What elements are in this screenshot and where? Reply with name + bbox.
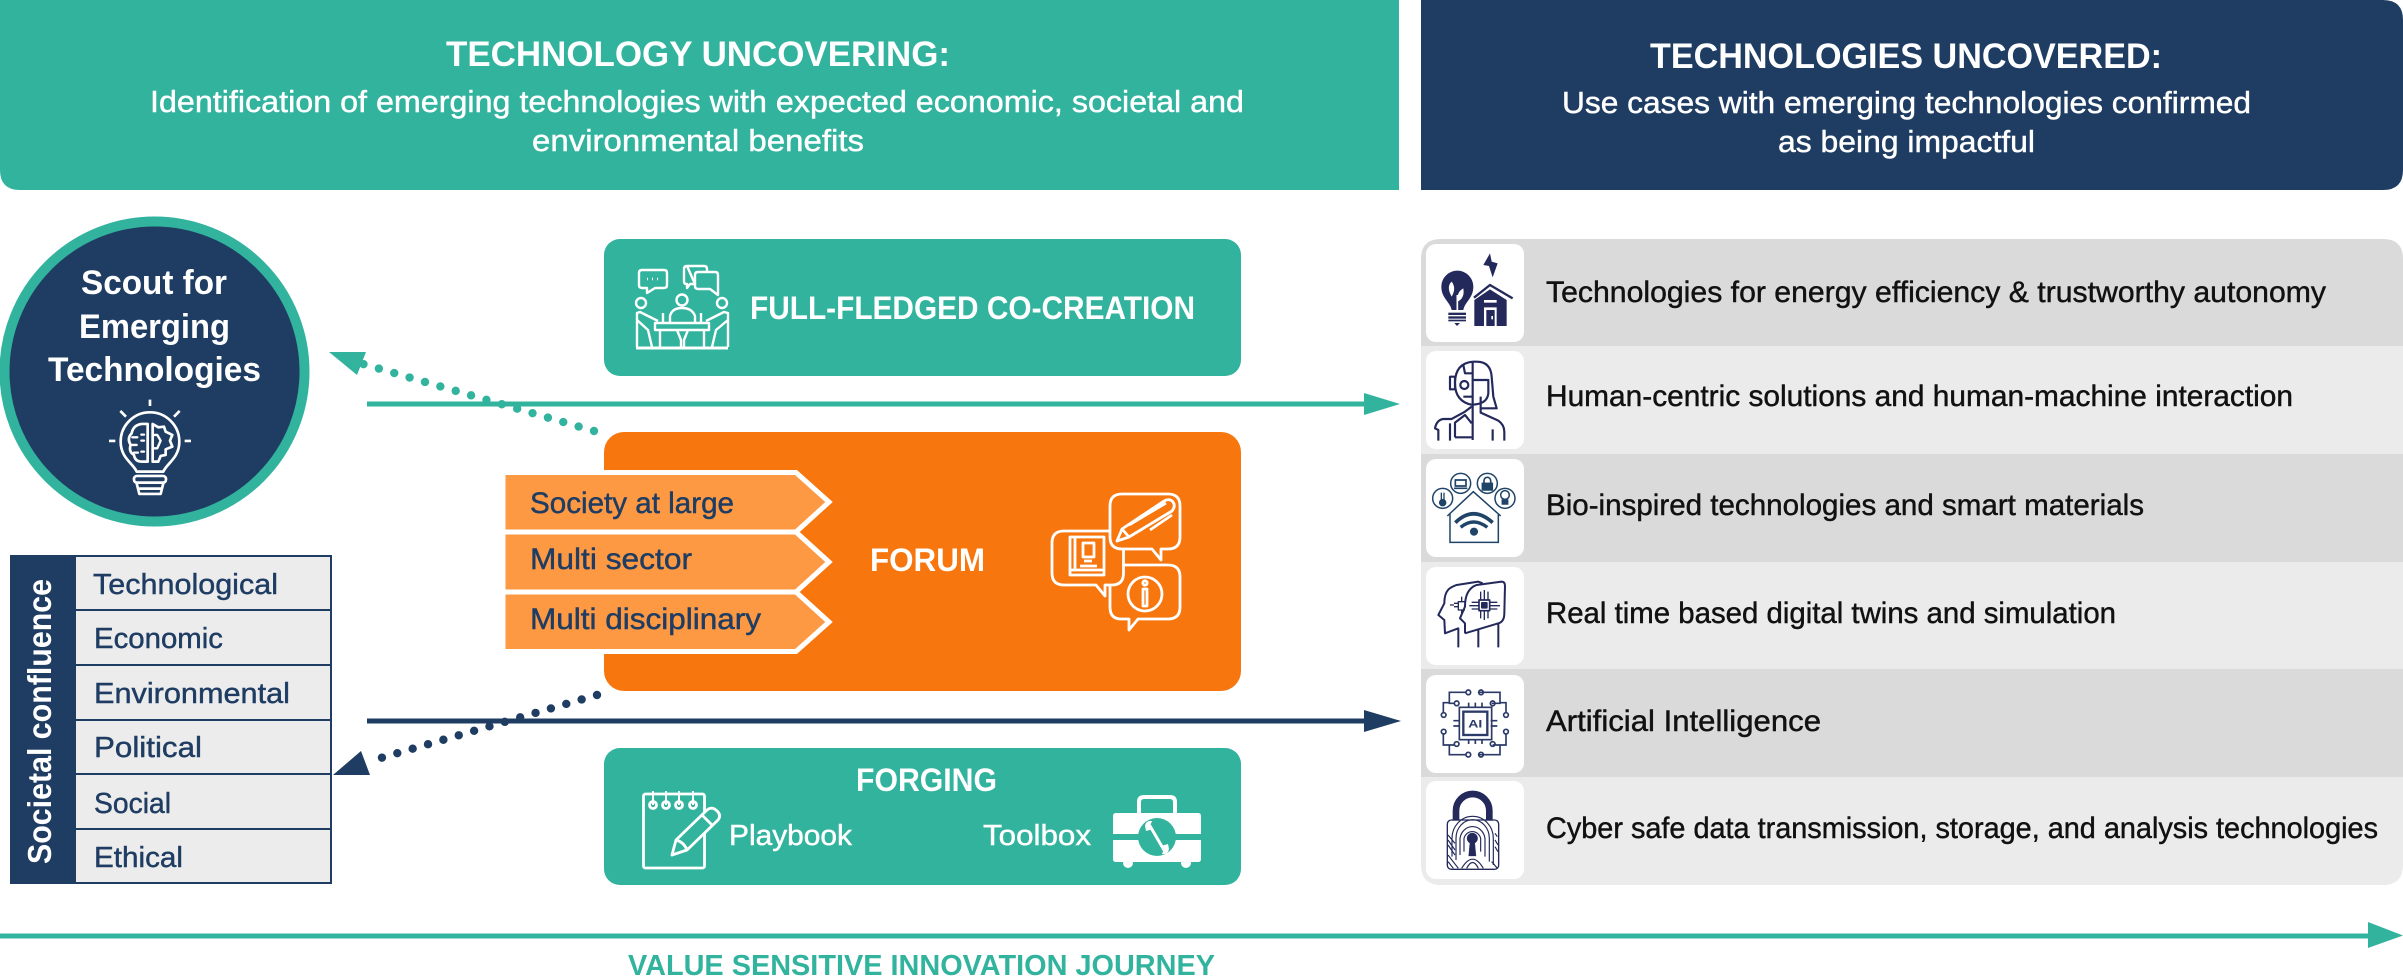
arrow: teal solid to use cases (367, 393, 1400, 415)
row: artificial intelligence: Artificial Intelligence (1546, 705, 1821, 738)
icon: ai chip (1441, 690, 1508, 757)
panel: societal confluence table: Political (94, 732, 202, 764)
row: energy efficiency: Technologies for energy efficiency & trustworthy autonomy (1546, 276, 2326, 309)
panel: full-fledged co-creation: FULL-FLEDGED CO-CREATION (750, 290, 1195, 326)
row: human-centric: Human-centric solutions and human-machine interaction (1546, 380, 2293, 413)
panel: technology uncovering header: TECHNOLOGY UNCOVERING: (446, 35, 950, 74)
panel: societal confluence table: Environmental (94, 678, 290, 710)
panel: use cases list (1421, 239, 2403, 885)
chevron: society at large: Society at large (530, 487, 734, 520)
chevron: multi disciplinary (503, 592, 829, 652)
panel: technology uncovering header (0, 0, 1399, 190)
icon: speech bubbles with pencil, book and info (1052, 494, 1180, 630)
arrow: navy solid to use cases (367, 710, 1401, 732)
panel: societal confluence table: Ethical (94, 842, 183, 874)
row: energy efficiency (1421, 239, 2403, 346)
panel: scout for emerging technologies (4, 222, 304, 522)
panel: societal confluence table (10, 555, 331, 884)
panel: technologies uncovered header: TECHNOLOGIES UNCOVERED: (1650, 37, 2162, 76)
row: digital twins (1421, 562, 2403, 669)
panel: full-fledged co-creation (604, 239, 1241, 376)
panel: forging (604, 748, 1241, 885)
panel: scout for emerging technologies: Emerging (79, 308, 230, 346)
panel: societal confluence table: Economic (94, 623, 223, 655)
icon: half robot half human (1435, 362, 1504, 441)
icon: smart home with wifi (1433, 473, 1515, 542)
panel: societal confluence table: Technological (93, 569, 278, 601)
panel: technology uncovering header: Identification of emerging technologies with expected economic, societal and (150, 84, 1244, 119)
icon: light bulb with brain and gear (109, 400, 191, 494)
row: digital twins: Real time based digital twins and simulation (1546, 597, 2116, 630)
icon: notepad and pencil (644, 791, 720, 868)
arrow: navy dotted to societal confluence (333, 695, 597, 775)
panel: societal confluence table: Social (94, 788, 171, 820)
icon: team meeting around a table (636, 266, 728, 348)
panel: forging: Toolbox (983, 820, 1092, 852)
row: cyber safe: Cyber safe data transmission, storage, and analysis technologies (1546, 812, 2378, 845)
chevron: multi sector: Multi sector (530, 543, 692, 576)
panel: forum (503, 432, 1241, 691)
arrow: teal dotted to scout circle (329, 352, 594, 431)
icon: toolbox with wrench (1113, 797, 1201, 868)
icon: fingerprint padlock (1447, 794, 1499, 869)
panel: technology uncovering header: environmental benefits (532, 123, 864, 158)
icon: bulb, leaf and house (1441, 253, 1513, 326)
panel: scout for emerging technologies: Technologies (48, 351, 261, 389)
arrow: value sensitive innovation journey (0, 922, 2403, 948)
panel: forum: FORUM (870, 542, 985, 578)
row: artificial intelligence (1421, 669, 2403, 777)
panel: technologies uncovered header (1421, 0, 2403, 190)
chevron: society at large (503, 472, 829, 532)
row: cyber safe (1421, 777, 2403, 885)
panel: forging: Playbook (729, 820, 853, 852)
text: societal confluence vertical label: Societal confluence (21, 579, 58, 864)
icon: twin heads with chips (1438, 582, 1505, 647)
row: bio-inspired (1421, 454, 2403, 562)
row: bio-inspired: Bio-inspired technologies and smart materials (1546, 489, 2144, 522)
chevron: multi sector (503, 532, 829, 592)
panel: technologies uncovered header: as being impactful (1778, 124, 2035, 159)
panel: scout for emerging technologies: Scout for (81, 264, 227, 302)
panel: technologies uncovered header: Use cases with emerging technologies confirmed (1562, 85, 2251, 120)
icon: ai chip: AI (1468, 718, 1482, 730)
panel: forging: FORGING (856, 762, 997, 798)
row: human-centric (1421, 346, 2403, 454)
chevron: multi disciplinary: Multi disciplinary (530, 603, 761, 636)
